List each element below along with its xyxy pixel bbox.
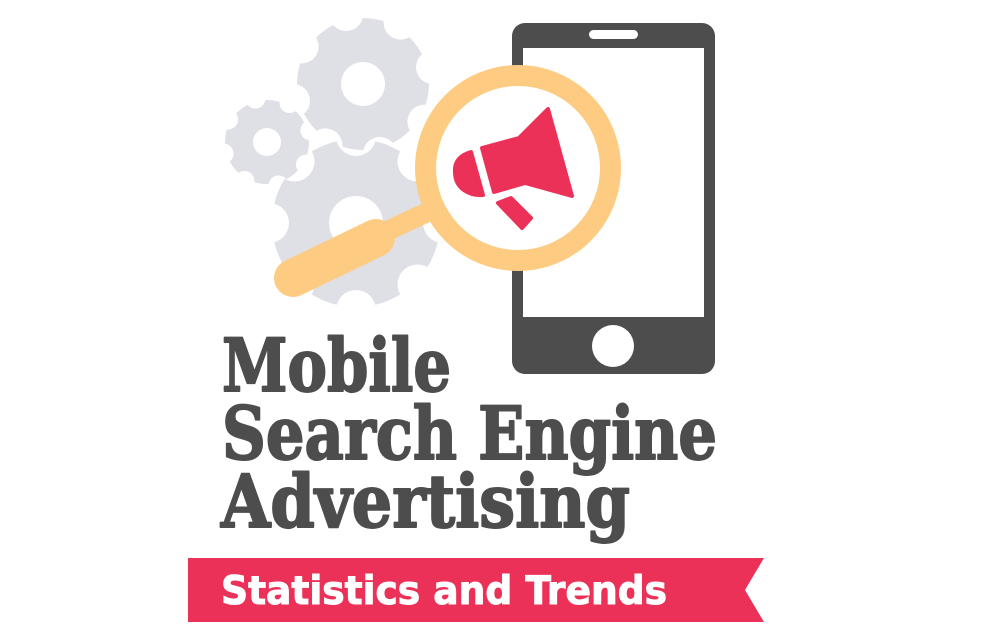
megaphone back xyxy=(455,152,483,195)
ribbon banner xyxy=(188,558,764,622)
title line 2: Search Engine xyxy=(222,391,717,477)
phone speaker xyxy=(589,30,638,39)
phone body xyxy=(512,23,715,374)
icon: magnifying glass xyxy=(293,76,610,278)
icon: small gear xyxy=(225,100,309,184)
icon: upper gear xyxy=(297,18,429,150)
infographic xyxy=(188,18,764,622)
megaphone handle xyxy=(498,198,531,228)
phone screen xyxy=(523,48,704,317)
title line 3: Advertising xyxy=(220,459,630,545)
icon: smartphone xyxy=(512,23,715,374)
icon: megaphone xyxy=(455,109,572,228)
megaphone horn xyxy=(482,109,572,196)
ribbon shape xyxy=(188,558,764,622)
magnifier shaft xyxy=(372,210,432,238)
magnifier lens xyxy=(426,76,610,260)
magnifier grip xyxy=(293,238,376,278)
phone home button xyxy=(592,325,634,367)
icon: large lower gear xyxy=(272,139,440,307)
title xyxy=(220,323,717,545)
icon: gears xyxy=(225,18,440,307)
subtitle: Statistics and Trends xyxy=(221,569,667,614)
title line 1: Mobile xyxy=(222,323,451,409)
